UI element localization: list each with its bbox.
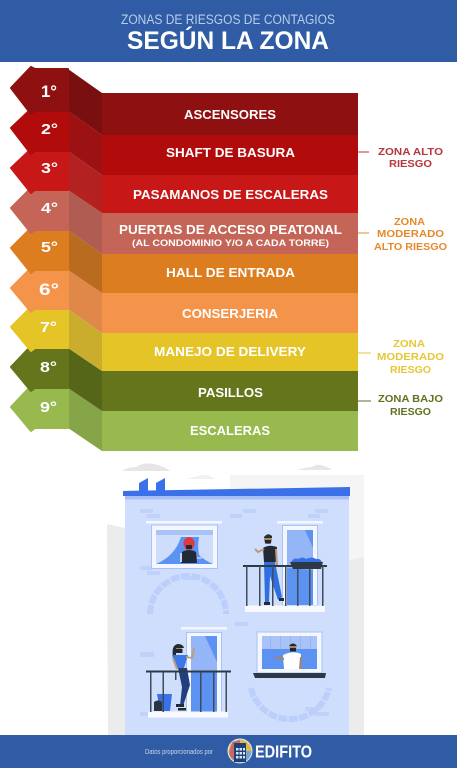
balcony with woman — [146, 627, 231, 718]
rank 9: escaleras — [11, 386, 358, 451]
background shapes — [107, 463, 364, 735]
rank 2: shaft de basura: SHAFT DE BASURA — [166, 146, 295, 160]
rank 8: pasillos: 8° — [40, 359, 57, 376]
rank 5: hall de entrada — [11, 228, 358, 293]
subtitle: ZONAS DE RIESGOS DE CONTAGIOS — [121, 12, 335, 27]
rank 6: conserjeria: CONSERJERIA — [182, 307, 278, 321]
zone label: bajo riesgo: RIESGO — [390, 406, 431, 418]
zone label: moderado alto riesgo: ZONA — [394, 216, 425, 228]
logo icon — [228, 739, 252, 763]
rank 3: pasamanos de escaleras: 3° — [41, 160, 58, 177]
zone label: alto riesgo: RIESGO — [389, 158, 432, 170]
brick arches — [150, 576, 226, 614]
wall bricks — [140, 509, 329, 716]
rank 2: shaft de basura — [11, 109, 358, 175]
rank 9: escaleras: 9° — [40, 399, 57, 416]
rank 4: puertas de acceso peatonal — [11, 188, 358, 254]
ranking staircase — [11, 67, 358, 451]
zone label: bajo riesgo — [358, 393, 443, 418]
header band — [0, 0, 457, 62]
zone label: moderado riesgo: MODERADO — [377, 351, 444, 363]
roof — [123, 478, 350, 496]
rank 8: pasillos: PASILLOS — [198, 386, 263, 400]
facade — [125, 496, 349, 735]
logo wordmark: EDIFITO — [255, 742, 312, 762]
footer credit: Datos proporcionados por — [145, 747, 213, 756]
rank 7: manejo de delivery: 7° — [40, 319, 57, 336]
window with man — [253, 632, 326, 678]
zone label: moderado alto riesgo: MODERADO — [377, 228, 444, 240]
rank 8: pasillos — [11, 346, 358, 411]
rank 9: escaleras: ESCALERAS — [190, 424, 270, 438]
rank 7: manejo de delivery — [11, 307, 358, 371]
zone label: moderado riesgo: ZONA — [393, 338, 425, 350]
rank 4: puertas de acceso peatonal: PUERTAS DE ACCESO PEATONAL — [119, 222, 342, 237]
zone label: alto riesgo: ZONA ALTO — [378, 146, 443, 158]
rank 1: ascensores: 1° — [41, 82, 57, 101]
zone label: moderado alto riesgo — [358, 216, 447, 253]
rank 5: hall de entrada: HALL DE ENTRADA — [166, 266, 295, 280]
rank 2: shaft de basura: 2° — [41, 121, 58, 138]
zone label: moderado riesgo: RIESGO — [390, 364, 431, 376]
rank 6: conserjeria: 6° — [39, 280, 59, 299]
zone label: alto riesgo — [358, 146, 443, 170]
title: SEGÚN LA ZONA — [127, 25, 329, 55]
building illustration — [107, 463, 364, 735]
zone label: moderado riesgo — [358, 338, 444, 376]
rank 3: pasamanos de escaleras — [11, 149, 358, 213]
rank 7: manejo de delivery: MANEJO DE DELIVERY — [154, 345, 307, 359]
rank 4: puertas de acceso peatonal: 4° — [41, 200, 58, 217]
window with woman — [146, 521, 222, 568]
balcony with man — [243, 521, 327, 612]
rank 4: puertas de acceso peatonal: (AL CONDOMINIO Y/O A CADA TORRE) — [132, 238, 329, 249]
rank 3: pasamanos de escaleras: PASAMANOS DE ESCALERAS — [133, 188, 328, 202]
zone label: moderado alto riesgo: ALTO RIESGO — [374, 241, 447, 253]
zone label: bajo riesgo: ZONA BAJO — [378, 393, 443, 405]
rank 6: conserjeria — [11, 268, 358, 333]
footer band — [0, 735, 457, 768]
rank 1: ascensores: ASCENSORES — [184, 108, 276, 122]
rank 5: hall de entrada: 5° — [41, 239, 58, 256]
rank 1: ascensores — [11, 67, 358, 135]
